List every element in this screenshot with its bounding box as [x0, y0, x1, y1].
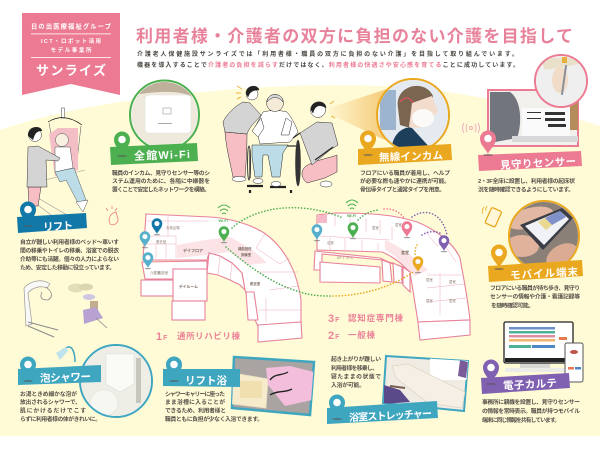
ribbon: facility badge: サンライズ [36, 63, 106, 78]
2F 3F caption [328, 313, 403, 342]
room labels [327, 222, 456, 303]
panel: bathing stretcher [327, 355, 470, 424]
2F 3F caption: 一般棟 [348, 330, 375, 340]
rooms upper [146, 216, 300, 322]
room labels: 相談室 [158, 270, 169, 275]
2F 3F caption: 2F [328, 330, 340, 342]
photo: lift machine [24, 281, 58, 337]
icon: hand with motion marks [106, 206, 118, 225]
description: lift bath: 職員ともに負担が少なく入浴できます。 [165, 415, 263, 423]
description: medical records: の情報を常時表示。職員が持つモバイル [482, 407, 580, 415]
panel: Wi-Fi [110, 80, 210, 194]
label: intercom: 無線インカム [379, 149, 443, 164]
label: mobile: モバイル端末 [510, 265, 579, 282]
description: lift: 間の移乗やトイレの移乗、浴室での脱衣 [20, 246, 119, 254]
panel: monitoring sensor [462, 55, 590, 194]
2F 3F caption: 3F [328, 313, 340, 325]
bottom block [258, 322, 302, 342]
label: lift bath [163, 356, 240, 387]
ribbon: facility badge: 日の出医療福祉グループ [31, 22, 112, 30]
room labels: 居室 [372, 225, 379, 230]
description: foam shower: 肌にかけるだけでこす [20, 406, 86, 414]
room labels: DF ﾃﾞｲﾙｰﾑ [337, 255, 353, 260]
photo: sensor on ceiling [535, 55, 590, 107]
description: mobile: センサーの情報や介護・看護記録等 [490, 292, 580, 300]
description: foam shower: 放出されるシャワーで、 [20, 398, 81, 406]
description: medical records: 端末に同じ情報を共有しています。 [482, 416, 560, 424]
2F 3F caption: 認知症専門棟 [348, 313, 403, 323]
label: lift [17, 202, 87, 234]
panel: lift bath [163, 356, 314, 423]
elderly man [252, 94, 298, 186]
description: lift bath [165, 390, 263, 423]
room labels: 脱衣室 [156, 239, 167, 244]
photo: staff wearing intercom [376, 78, 451, 153]
room labels: 食堂 [401, 249, 409, 255]
room labels: 居室 [449, 298, 456, 303]
icon: light rays [236, 86, 336, 118]
floor plan: 1F [141, 214, 302, 343]
photo: lift bath [232, 357, 314, 415]
lower rooms [142, 261, 207, 279]
photo: slings and seat [68, 284, 107, 328]
1F caption: 1F [156, 331, 168, 343]
description: stretcher: 入浴が可能。 [331, 381, 365, 389]
description: foam shower: らずに利用者様の体がきれいに。 [20, 415, 101, 423]
room labels: 脱衣室 [250, 281, 261, 286]
ribbon: facility badge: モデル事業所 [50, 46, 92, 54]
woman carer [223, 86, 261, 182]
label: Wi-Fi: 全館Wi-Fi [134, 147, 190, 163]
room labels: 浴室 [327, 240, 334, 245]
label: stretcher: 浴室ストレッチャー [349, 407, 432, 424]
description: intercom [360, 169, 450, 194]
room labels: 居室 [395, 222, 402, 227]
icon: signal waves [462, 123, 480, 133]
panel: intercom [329, 78, 452, 194]
label: stretcher [327, 394, 438, 424]
corridor tint [177, 237, 267, 265]
dotted network lines [226, 208, 447, 296]
illustration: carer and patient in hoist [27, 108, 88, 222]
room labels: 介護室 [150, 270, 161, 275]
label: lift: リフト [43, 220, 73, 234]
label: foam shower: 泡シャワー [40, 370, 91, 385]
intro text: 介護老人保健施設サンライズでは「利用者様・職員の双方に負担のない介護」を目指して取り組んでいます。 [137, 50, 518, 58]
room labels: デイルーム [179, 284, 198, 289]
room labels: デイフロア [183, 247, 203, 253]
description: sensor: 況を随時確認できるようにしています。 [478, 186, 574, 194]
description: mobile: フロアにいる職員が持ち歩き、見守り [490, 284, 580, 292]
title: 利用者様・介護者の双方に負担のない介護を目指して [136, 26, 573, 46]
floor plan: 2F and 3F [314, 213, 470, 342]
room labels: 居室 [449, 279, 456, 284]
description: lift bath: できるため、利用者様と [165, 406, 226, 414]
room labels [150, 225, 261, 289]
icon: Wi-Fi 1F: Wi-Fi [218, 219, 228, 223]
description: lift: 介助等にも活躍。個々の人力によらない [20, 255, 119, 263]
description: lift: ため、安定した移動に役立っています。 [20, 264, 115, 272]
description: foam shower [20, 390, 101, 423]
corridor tint [385, 240, 428, 276]
description: stretcher [331, 355, 381, 389]
room labels: 機能回復 [238, 246, 252, 251]
icon: Wi-Fi 2F: Wi-Fi [347, 214, 356, 218]
intro text [137, 50, 519, 69]
curved rooms [207, 253, 245, 290]
ribbon: facility badge [22, 13, 120, 95]
label: sensor: 見守りセンサー [500, 155, 576, 172]
description: sensor: 2・3F全床に設置し、利用者様の起床状 [478, 177, 575, 185]
description: intercom: が必要な際も速やかに連携が可能。 [360, 177, 450, 185]
description: sensor [478, 177, 575, 194]
room labels: 居室 [426, 298, 433, 303]
intro text: 機器を導入することで介護者の負担を減らすだけではなく、利用者様の快適さや安心感を育てることに成功しています。 [137, 61, 519, 69]
description: medical records [482, 398, 580, 424]
1F caption [156, 331, 240, 343]
panel: foam shower [18, 345, 152, 423]
photo: sensor panel [488, 90, 578, 146]
description: stretcher: 利用者様を移乗し、 [331, 364, 378, 372]
wheelchair [247, 140, 300, 193]
description: lift bath: シャワーキャリーに座った [165, 390, 225, 398]
description: mobile: を随時確認可能。 [491, 302, 534, 310]
description: lift [20, 238, 119, 272]
photo: hand holding phone [508, 200, 580, 264]
icon: monitor and phone [504, 322, 583, 382]
label: medical records: 電子カルテ [503, 378, 557, 392]
description: lift bath: まま浴槽に入ることが [165, 398, 225, 406]
man carer [293, 102, 338, 187]
description: Wi-Fi [112, 169, 210, 194]
photo: Wi-Fi router [130, 80, 200, 150]
panel: mobile device [482, 201, 583, 310]
description: intercom: 骨伝導タイプと通常タイプを用意。 [360, 186, 445, 194]
description: Wi-Fi: 置くことで安定したネットワークを構築。 [112, 186, 210, 194]
room labels: 訓練室 [241, 252, 252, 257]
wing outline [317, 213, 470, 322]
ribbon: facility badge: ICT・ロボット活用 [41, 37, 101, 45]
description: Wi-Fi: ステム運用のために、各階に中継器を [112, 177, 210, 185]
icon: Wi-Fi 2F [346, 200, 358, 218]
beam from carer to intercom photo [329, 88, 390, 140]
rooms upper [320, 214, 466, 315]
description: stretcher: 寝たままの状態で [331, 372, 381, 380]
bottom block [418, 320, 470, 340]
panel: electronic medical records [481, 322, 583, 424]
illustration: staff and wheelchair user [223, 86, 338, 193]
cream background area [0, 85, 600, 436]
description: lift: 自立が難しい利用者様のベッド～車いす [20, 238, 119, 246]
icon: Wi-Fi 1F [218, 205, 230, 223]
map pins [140, 218, 449, 273]
description: mobile [490, 284, 580, 310]
1F caption: 通所リハビリ棟 [177, 331, 240, 341]
upper wing outline [143, 214, 301, 326]
description: intercom: フロアにいる職員が着用し、ヘルプ [360, 169, 450, 177]
description: foam shower: お湯ときめ細かな泡が [20, 390, 77, 398]
lower floor block [314, 251, 410, 292]
label: lift bath: リフト浴 [185, 374, 228, 387]
photo: stretcher [383, 356, 470, 411]
room labels: お風呂場 [166, 225, 180, 230]
room labels: 居室 [426, 277, 433, 282]
icon: phone [482, 206, 502, 227]
icon: shower head [56, 347, 75, 362]
panel: lift [17, 108, 119, 337]
photo: shower unit [80, 345, 152, 417]
description: Wi-Fi: 職員のインカム、見守りセンサー等のシ [112, 169, 210, 177]
description: medical records: 事務所に親機を設置し、見守りセンサー [482, 398, 580, 406]
description: stretcher: 起き上がりが難しい [331, 355, 381, 363]
